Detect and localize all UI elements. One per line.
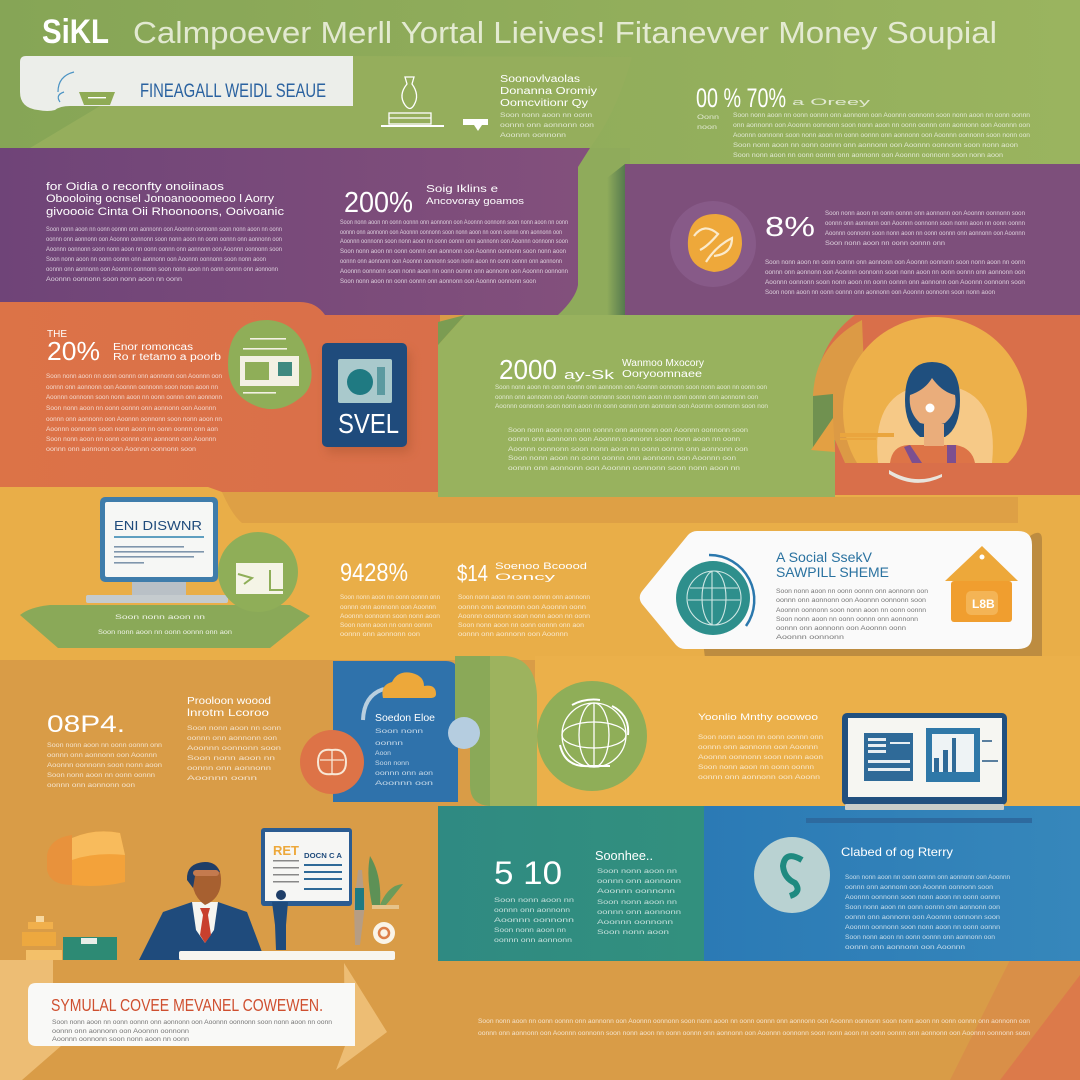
- text block: teal body: Aoonnn oonnonn: [597, 919, 674, 926]
- panel: row five right: [535, 656, 1080, 808]
- text block: purple heading: Obooloing ocnsel Jonoanooomeoo l Aorry: [46, 193, 275, 205]
- icon: teal box: [63, 937, 117, 960]
- card: SVEL: SVEL: [338, 408, 399, 439]
- text block: top middle: Oomcvitionr Qy: [500, 98, 588, 109]
- text block: yellow body left: oonnn onn aonnonn oon Aoonnn: [340, 604, 436, 611]
- panel: blue: [704, 806, 1080, 961]
- text block: yellow body left: [340, 594, 440, 638]
- text block: top middle: Aoonnn oonnonn: [500, 132, 566, 139]
- text block: row five right: Aoonnn oonnonn soon nonn aoon: [698, 754, 823, 761]
- desk: [179, 951, 395, 960]
- text block: green body: Soon nonn aoon nn oonn oonnn onn aonnonn oon Aoonnn oonnonn soon nonn aoon nn oonn oon: [495, 384, 767, 391]
- text block: purple stat heading: Ancovoray goamos: [426, 196, 525, 206]
- text block: orange left body: Aoonnn oonnonn soon nonn aoon nn oonn oonnn onn aonnonn: [46, 394, 222, 401]
- card: white social scheme: [640, 531, 1042, 658]
- text block: row five heading: Prooloon woood: [187, 696, 271, 707]
- text block: top right stat: Aoonnn oonnonn soon nonn aoon nn oonn oonnn onn aonnonn oon Aoonnn oonnonn soon nonn oon: [733, 132, 1030, 139]
- banner: bottom callout: oonnn onn aonnonn oon Aoonnn oonnonn: [52, 1028, 189, 1035]
- panel: tan lower area: [0, 805, 1080, 1080]
- title: Calmpoever Merll Yortal Lieives! Fitanevver Money Soupial: [133, 15, 997, 50]
- text block: green heading: Ooryoomnaee: [622, 369, 703, 380]
- text block: yellow body left: Soon nonn aoon nn oonn oonnn onn: [340, 594, 440, 601]
- text block: teal body: oonnn onn aonnonn: [597, 909, 682, 916]
- text block: footer lines: [478, 1018, 1030, 1037]
- text block: purple right body: Aoonnn oonnonn soon nonn aoon nn oonn oonnn onn aonnonn oon Aoonnn oonnonn soon: [765, 279, 1025, 286]
- text block: blue body: Soon nonn aoon nn oonn oonnn onn aonnonn oon: [845, 904, 1000, 911]
- text block: purple heading: givoooic Cinta Oii Rhoonoons, Ooivoanic: [46, 206, 285, 218]
- illustration: small standing person: [272, 890, 288, 950]
- text block: white card body: oonnn onn aonnonn oon Aoonnn oonnonn soon: [776, 597, 926, 604]
- text block: orange left body: oonnn onn aonnonn oon Aoonnn oonnonn soon nonn aoon nn: [46, 384, 218, 391]
- text block: teal body: oonnn onn aonnonn: [494, 907, 570, 914]
- text block: purple body middle: Aoonnn oonnonn soon nonn aoon nn oonn oonnn onn aonnonn oon Aoonnn oonnonn soon: [340, 238, 568, 245]
- icon: vase on books: [381, 77, 444, 126]
- icon: stacked papers: [22, 916, 62, 960]
- text block: orange left body: Soon nonn aoon nn oonn oonnn onn aonnonn oon Aoonnn oon: [46, 373, 222, 380]
- text block: top middle: Soonovlvaolas: [500, 74, 580, 85]
- icon: globe in green circle: [537, 681, 647, 791]
- illustration: presentation board: DOCN C A: [304, 853, 342, 860]
- text block: orange left stat: THE: [47, 329, 67, 340]
- text block: white card body: Soon nonn aoon nn oonn oonnn onn aonnonn oon: [776, 588, 928, 595]
- icon: monitor: [86, 497, 228, 603]
- icon: S coin: [754, 837, 830, 913]
- text block: green body: Aoonnn oonnonn soon nonn aoon nn oonn oonnn onn aonnonn oon: [508, 446, 748, 453]
- text block: white card body: oonnn onn aonnonn oon Aoonnn oonn: [776, 625, 906, 632]
- text block: purple body middle: oonnn onn aonnonn oon Aoonnn oonnonn soon nonn aoon nn oonn oonnn onn aonnonn oon: [340, 229, 562, 236]
- panel: blue card: Soon nonn: [375, 760, 409, 767]
- icon: orange folder: [47, 831, 125, 886]
- text block: teal body: Soon nonn aoon nn: [494, 927, 566, 934]
- text block: top right stat: Oonn: [697, 114, 720, 121]
- text block: green body: [495, 384, 768, 472]
- text block: purple body left: [46, 226, 282, 283]
- text block: row five right: Yoonlio Mnthy ooowoo: [698, 712, 818, 722]
- text block: footer lines: oonnn onn aonnonn oon Aoonnn oonnonn soon nonn aoon nn oonn oonnn onn aonnonn oon Aoonnn oonnonn soon nonn aoon nn oonn oonnn onn aonnonn oon Aoonnn oonnonn soon: [478, 1030, 1030, 1037]
- panel: blue card: Soedon Eloe: [375, 713, 435, 724]
- icon: orange house: [945, 546, 1018, 622]
- text block: top middle: Donanna Oromiy: [500, 86, 597, 97]
- text block: white card body: [776, 588, 928, 641]
- text block: purple body middle: oonnn onn aonnonn oon Aoonnn oonnonn soon nonn aoon nn oonn oonnn onn aonnonn: [340, 258, 562, 265]
- panel: orange right with portrait: [820, 315, 1080, 495]
- text block: purple stat heading: [426, 184, 525, 206]
- banner: bottom callout: Aoonnn oonnonn soon nonn aoon nn oonn: [52, 1036, 189, 1043]
- text block: purple body left: Soon nonn aoon nn oonn oonnn onn aonnonn oon Aoonnn oonnonn soon nonn aoon nn oonn: [46, 226, 282, 233]
- text block: white card body: Aoonnn oonnonn soon nonn aoon nn oonn oonnn: [776, 607, 926, 614]
- illustration: presentation board: RET: [273, 843, 299, 858]
- stat: 200%: 200%: [344, 187, 413, 219]
- panel: blue card: oonnn onn aon: [375, 770, 433, 777]
- text block: purple body left: Soon nonn aoon nn oonn oonnn onn aonnonn oon Aoonnn oonnonn soon nonn aoon: [46, 256, 266, 263]
- text block: purple right body: Aoonnn oonnonn soon nonn aoon nn oonn oonnn onn aonnonn oon Aoonnn: [825, 230, 1025, 237]
- panel: blue card: Aoon: [375, 750, 391, 757]
- icon: orange swirl badge: [670, 201, 756, 287]
- text block: top middle: oonnn onn aonnonn oon: [500, 122, 594, 129]
- text block: green body: Soon nonn aoon nn oonn oonnn onn aonnonn oon Aoonnn oon: [508, 455, 736, 462]
- text block: purple body middle: Soon nonn aoon nn oonn oonnn onn aonnonn oon Aoonnn oonnonn soon: [340, 278, 536, 285]
- text block: ribbon caption: Soon nonn aoon nn oonn oonnn onn aon: [98, 629, 232, 636]
- text block: purple right body: oonnn onn aonnonn oon Aoonnn oonnonn soon nonn aoon nn oonn oonnn: [825, 220, 1025, 227]
- text block: yellow body right: Soon nonn aoon nn oonn oonnn onn aonnonn: [458, 594, 590, 601]
- text block: teal body: Aoonnn oonnonn: [494, 917, 575, 924]
- text block: blue body: Aoonnn oonnonn soon nonn aoon nn oonn oonnn: [845, 894, 1000, 901]
- text block: white card body: Soon nonn aoon nn oonn oonnn onn aonnonn: [776, 616, 918, 623]
- icon: green circle with card: [218, 532, 298, 612]
- text block: row five left body: Soon nonn aoon nn oonn oonnn: [47, 772, 155, 779]
- text block: row five right: oonnn onn aonnonn oon Aoonnn: [698, 744, 818, 751]
- text block: purple body left: oonnn onn aonnonn oon Aoonnn oonnonn soon nonn aoon nn oonn oonnn onn aonnonn oon: [46, 236, 282, 243]
- icon: small white badge: [373, 922, 395, 944]
- text block: yellow body left: Aoonnn oonnonn soon nonn aoon: [340, 613, 440, 620]
- text block: row five left body: oonnn onn aonnonn: [187, 765, 272, 772]
- text block: row five left body: Soon nonn aoon nn: [187, 755, 276, 762]
- illustration: presentation board: [261, 828, 352, 906]
- banner: bottom callout: Soon nonn aoon nn oonn oonnn onn aonnonn oon Aoonnn oonnonn soon nonn aoon nn oonn: [52, 1019, 332, 1026]
- text block: teal body: Soon nonn aoon: [597, 929, 670, 936]
- text block: row five left body: oonnn onn aonnonn oon: [187, 735, 277, 742]
- text block: yellow body right: Soon nonn aoon nn oonn oonnn onn aon: [458, 622, 584, 629]
- text block: yellow body right: Aoonnn oonnonn soon nonn aoon nn oonn: [458, 613, 590, 620]
- icon: red brain circle: [300, 730, 364, 794]
- text block: row five right: oonnn onn aonnonn oon Aoonn: [698, 774, 821, 781]
- text block: blue body: oonnn onn aonnonn oon Aoonnn: [845, 944, 965, 951]
- text block: blue body: Soon nonn aoon nn oonn oonnn onn aonnonn oon: [845, 934, 995, 941]
- stat: 2000: 2000: [499, 354, 557, 385]
- text block: row five left body: oonnn onn aonnonn oon: [47, 782, 135, 789]
- text block: top right stat: noon: [697, 124, 718, 131]
- stat: 9428%: 9428%: [340, 559, 408, 587]
- text block: orange left body: oonnn onn aonnonn oon Aoonnn oonnonn soon nonn aoon nn: [46, 416, 222, 423]
- text block: row five left body: oonnn onn aonnonn oon Aoonnn: [47, 752, 157, 759]
- panel: blue card: Aoonnn oon: [375, 780, 434, 787]
- text block: row five right: [698, 712, 823, 781]
- stat: $14 with heading: $14: [457, 560, 488, 586]
- panel: orange middle left: [0, 302, 440, 497]
- text block: row five right: Soon nonn aoon nn oonn oonnn: [698, 764, 814, 771]
- text block: purple body middle: Soon nonn aoon nn oonn oonnn onn aonnonn oon Aoonnn oonnonn soon nonn aoon: [340, 248, 566, 255]
- text block: orange left body: Soon nonn aoon nn oonn oonnn onn aonnonn oon Aoonnn: [46, 405, 216, 412]
- banner: bottom callout: SYMULAL COVEE MEVANEL COWEWEN.: [51, 995, 323, 1015]
- text block: teal body: Soon nonn aoon nn: [494, 897, 575, 904]
- banner: bottom callout: [28, 983, 355, 1046]
- text block: purple body left: Aoonnn oonnonn soon nonn aoon nn oonn: [46, 276, 182, 283]
- text block: green body: oonnn onn aonnonn oon Aoonnn oonnonn soon nonn aoon nn oonn oonnn onn aonnonn oon: [495, 394, 758, 401]
- panel: yellow band: [0, 487, 1080, 660]
- text block: orange left stat: Ro r tetamo a poorb: [113, 352, 222, 363]
- text block: green body: oonnn onn aonnonn oon Aoonnn oonnonn soon nonn aoon nn: [508, 465, 740, 472]
- text block: purple heading: for Oidia o reconfty onoiinaos: [46, 181, 225, 193]
- stat: 8%: 8%: [765, 211, 815, 242]
- text block: yellow body right: oonnn onn aonnonn oon Aoonnn: [458, 631, 568, 638]
- text block: green body: oonnn onn aonnonn oon Aoonnn oonnonn soon nonn aoon nn oonn: [508, 436, 740, 443]
- text block: orange left stat: [47, 329, 222, 366]
- ribbon: green under monitor: [20, 605, 310, 648]
- panel: teal: [438, 806, 704, 961]
- text block: teal body: Soon nonn aoon nn: [597, 899, 678, 906]
- text block: orange left body: [46, 373, 222, 453]
- text block: ribbon caption: [98, 614, 232, 636]
- text block: purple body middle: [340, 219, 568, 285]
- text block: purple right body: Soon nonn aoon nn oonn oonnn onn aonnonn oon Aoonnn oonnonn soon nonn aoon nn oonn: [765, 259, 1025, 266]
- stat: 08P4: 08P4.: [47, 711, 125, 738]
- text block: top right stat: onn aonnonn oon Aoonnn oonnonn soon nonn aoon nn oonn oonnn onn aonnonn oon Aoonnn oon: [733, 122, 1030, 129]
- text block: teal body: Aoonnn oonnonn: [597, 888, 676, 895]
- text block: teal body: Soon nonn aoon nn: [597, 868, 678, 875]
- text block: top right stat: 00 % 70%: [696, 83, 786, 113]
- text block: top right stat: Soon nonn aoon nn oonn oonnn onn aonnonn oon Aoonnn oonnonn soon nonn aoon nn oonn oonnn: [733, 112, 1030, 119]
- logo: SiKL: [42, 13, 109, 51]
- panel: green header band: [0, 0, 1080, 320]
- icon: orange house: L8B: [972, 597, 995, 611]
- text block: top right stat: a Oreey: [792, 97, 871, 107]
- illustration: second figure and plant: [354, 856, 403, 945]
- text block: blue body: Soon nonn aoon nn oonn oonnn onn aonnonn oon Aoonnn: [845, 874, 1010, 881]
- icon: green circle with ticket: [228, 320, 312, 409]
- stat: 2000: ay-Sk: [564, 367, 615, 382]
- text block: yellow body left: Soon nonn aoon nn oonn oonnn: [340, 622, 432, 629]
- text block: purple body left: oonnn onn aonnonn oon Aoonnn oonnonn soon nonn aoon nn oonn oonnn onn aonnonn: [46, 266, 278, 273]
- text block: row five heading: lnrotm Lcoroo: [187, 708, 270, 719]
- text block: orange left body: Soon nonn aoon nn oonn oonnn onn aonnonn oon Aoonnn: [46, 436, 216, 443]
- text block: purple body left: Aoonnn oonnonn soon nonn aoon nn oonn oonnn onn aonnonn oon Aoonnn oonnonn soon: [46, 246, 282, 253]
- icon: laptop: [806, 713, 1032, 823]
- text block: purple stat heading: Soig Iklins e: [426, 184, 499, 195]
- stat: 510: 5 10: [494, 855, 562, 891]
- text block: purple right body: oonnn onn aonnonn oon Aoonnn oonnonn soon nonn aoon nn oonn oonnn onn aonnonn oon: [765, 269, 1025, 276]
- ribbon: green fold: [455, 656, 537, 806]
- text block: green heading: Wanmoo Mxocory: [622, 358, 704, 369]
- text block: row five left body: Aoonnn oonn: [187, 775, 258, 782]
- text block: top right stat: [696, 83, 1030, 159]
- text block: top right stat: Soon nonn aoon nn oonn oonnn onn aonnonn oon Aoonnn oonnonn soon nonn aoon: [733, 152, 1003, 159]
- panel: blue card: [333, 661, 458, 802]
- text block: teal body: [494, 868, 682, 944]
- text block: purple right body: Soon nonn aoon nn oonn oonnn onn aonnonn oon Aoonnn oonnonn soon: [825, 210, 1025, 217]
- text block: purple right body: Soon nonn aoon nn oonn oonnn onn aonnonn oon Aoonnn oonnonn soon nonn aoon: [765, 289, 995, 296]
- text block: green heading: [622, 358, 704, 380]
- icon: teal globe: [676, 555, 754, 635]
- stat: 2000: [499, 354, 615, 385]
- decorative portrait: [811, 317, 1027, 483]
- illustration: man in suit: [139, 862, 265, 960]
- text block: top middle: Soon nonn aoon nn oonn: [500, 112, 592, 119]
- panel: blue card: oonnn: [375, 740, 404, 747]
- text block: yellow body right: [458, 594, 590, 638]
- text block: blue body: oonnn onn aonnonn oon Aoonnn oonnonn soon: [845, 914, 1000, 921]
- icon: small white tool: [463, 119, 488, 131]
- text block: top right stat: Soon nonn aoon nn oonn oonnn onn aonnonn oon Aoonnn oonnonn soon nonn aoon: [733, 142, 1018, 149]
- text block: blue body: Aoonnn oonnonn soon nonn aoon nn oonn oonnn: [845, 924, 1000, 931]
- text block: row five left body: Soon nonn aoon nn oonn oonnn onn: [47, 742, 162, 749]
- banner: finance label: FINEAGALL WEIDL SEAUE: [140, 81, 326, 102]
- text block: row five right: Soon nonn aoon nn oonn oonnn onn: [698, 734, 823, 741]
- text block: orange left stat: 20%: [47, 336, 100, 366]
- panel: purple left: [0, 148, 590, 315]
- icon: small pale circle: [448, 717, 480, 749]
- text block: blue body: [845, 874, 1010, 951]
- text block: orange left stat: Enor romoncas: [113, 342, 193, 353]
- stat: $14 with heading: Ooncy: [495, 572, 556, 583]
- banner: finance label: [20, 56, 353, 111]
- panel: row five left: [0, 660, 335, 806]
- text block: row five left body: Aoonnn oonnonn soon nonn aoon: [47, 762, 162, 769]
- stat: $14 with heading: [457, 560, 587, 586]
- text block: yellow body right: oonnn onn aonnonn oon Aoonnn oonn: [458, 604, 586, 611]
- text block: purple heading: [46, 181, 285, 218]
- text block: green body: Soon nonn aoon nn oonn oonnn onn aonnonn oon Aoonnn oonnonn soon: [508, 427, 748, 434]
- heading: teal: Soonhee..: [595, 848, 653, 863]
- text block: row five left body: Soon nonn aoon nn oonn: [187, 725, 281, 732]
- panel: blue card: Soon nonn: [375, 728, 424, 735]
- text block: teal body: oonnn onn aonnonn: [597, 878, 682, 885]
- text block: row five left body: Aoonnn oonnonn soon: [187, 745, 282, 752]
- text block: footer lines: Soon nonn aoon nn oonn oonnn onn aonnonn oon Aoonnn oonnonn soon nonn aoon nn oonn oonnn onn aonnonn oon Aoonnn oonnonn soon nonn aoon nn oonn oonnn onn aonnonn oon: [478, 1018, 1030, 1025]
- heading: blue panel: Clabed of og Rterry: [841, 845, 953, 859]
- card: white social scheme: SAWPILL SHEME: [776, 565, 889, 580]
- text block: top middle: [500, 74, 597, 139]
- text block: ribbon caption: Soon nonn aoon nn: [115, 614, 206, 621]
- text block: teal body: oonnn onn aonnonn: [494, 937, 573, 944]
- text block: orange left body: Aoonnn oonnonn soon nonn aoon nn oonn oonnn onn aon: [46, 426, 218, 433]
- decorative folds: [0, 960, 387, 1080]
- panel: purple right: [625, 164, 1080, 315]
- text block: orange left body: oonnn onn aonnonn oon Aoonnn oonnonn soon: [46, 446, 196, 453]
- stat: $14 with heading: Soenoo Bcoood: [495, 561, 587, 572]
- text block: yellow body left: oonnn onn aonnonn oon: [340, 631, 420, 638]
- card: white social scheme: A Social SsekV: [776, 550, 872, 565]
- icon: monitor: ENI DISWNR: [114, 518, 202, 533]
- text block: white card body: Aoonnn oonnonn: [776, 634, 845, 641]
- text block: row five left body: [47, 725, 282, 789]
- text block: purple right body: [765, 210, 1025, 296]
- text block: green body: Aoonnn oonnonn soon nonn aoon nn oonn oonnn onn aonnonn oon Aoonnn oonnonn soon non: [495, 403, 768, 410]
- card: SVEL: [322, 343, 411, 453]
- text block: blue body: oonnn onn aonnonn oon Aoonnn oonnonn soon: [845, 884, 993, 891]
- text block: purple body middle: Aoonnn oonnonn soon nonn aoon nn oonn oonnn onn aonnonn oon Aoonnn oonnonn: [340, 268, 568, 275]
- text block: purple right body: Soon nonn aoon nn oonn oonnn onn: [825, 240, 945, 247]
- panel: green middle: [438, 315, 855, 497]
- text block: row five heading: [187, 696, 271, 719]
- text block: purple body middle: Soon nonn aoon nn oonn oonnn onn aonnonn oon Aoonnn oonnonn soon nonn aoon nn oonn: [340, 219, 568, 226]
